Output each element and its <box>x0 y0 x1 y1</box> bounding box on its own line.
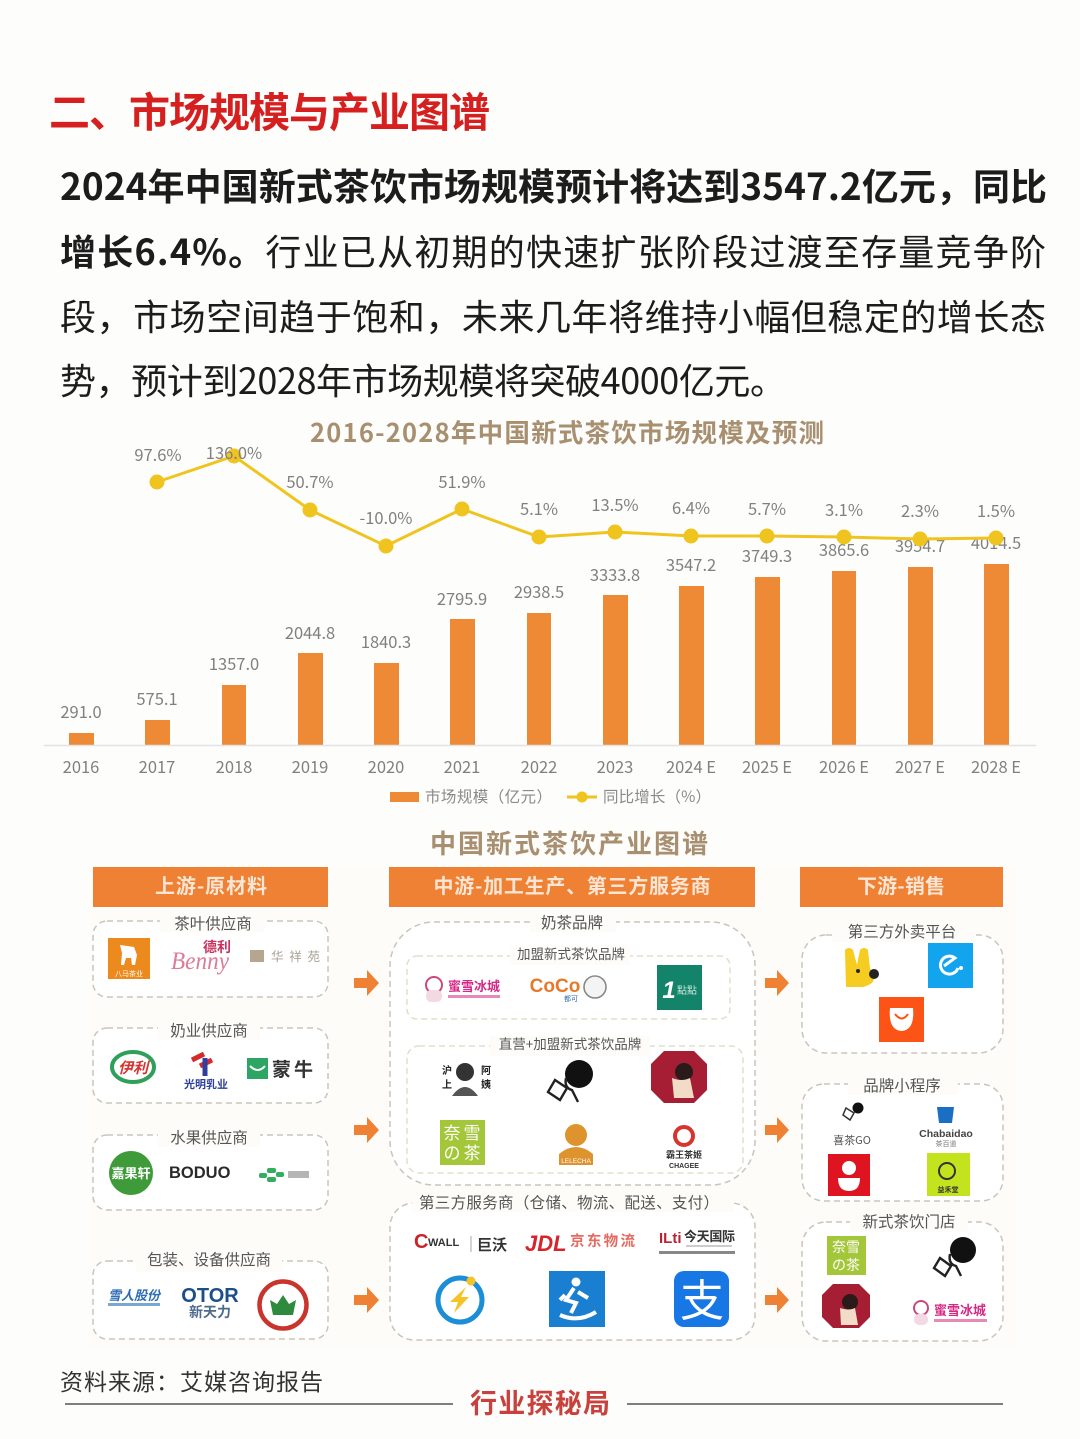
panel: brand mini programs: 品牌小程序 <box>863 1074 941 1096</box>
column: midstream <box>389 867 755 1340</box>
heading: midstream <box>389 867 755 907</box>
icon: alipay: 支 <box>680 1265 724 1329</box>
logo: mixue: 蜜雪冰城 <box>934 1300 986 1319</box>
heading: midstream: 中游-加工生产、第三方服务商 <box>434 870 710 899</box>
growth labels: 13.5% <box>591 492 639 516</box>
heading: upstream <box>93 867 328 907</box>
logo: OTOR: 新天力 <box>189 1302 231 1322</box>
logo: huaxiangyuan <box>250 946 320 965</box>
logo: chagee <box>666 1127 702 1170</box>
logo: fruit juice supplier <box>259 1168 309 1182</box>
logo: Benny: Benny <box>171 948 230 975</box>
panel: milk tea brands <box>390 911 755 1185</box>
intro paragraph <box>60 157 1047 405</box>
bar value labels: 3954.7 <box>895 533 945 557</box>
bar value labels <box>60 530 1021 723</box>
icon: bama tea: 八马茶业 <box>115 969 143 979</box>
logo: hu shang a yi: 阿 <box>481 1062 491 1077</box>
logo: G-WALL: WALL <box>428 1237 459 1249</box>
logo: mixue: 蜜雪冰城 <box>448 976 500 995</box>
panel: packaging and equipment suppliers: 包装、设备供应商 <box>147 1248 271 1270</box>
footer rule right <box>627 1403 1003 1405</box>
year labels <box>63 754 1021 778</box>
logo: Benny <box>171 937 231 975</box>
logo: yidiandian <box>657 965 702 1010</box>
bar value labels: 1840.3 <box>361 629 411 653</box>
panel: fruit suppliers: 水果供应商 <box>170 1126 248 1148</box>
logo: JDL: 京东物流 <box>570 1230 636 1251</box>
legend: 同比增长（%） <box>603 785 711 807</box>
industry map title: 中国新式茶饮产业图谱 <box>430 824 708 861</box>
icon: smile delivery <box>879 997 924 1042</box>
growth labels: 50.7% <box>286 469 334 493</box>
panel: direct and franchise brands <box>407 1033 743 1173</box>
logo: nayuki <box>827 1236 866 1275</box>
bar value labels: 2938.5 <box>514 579 564 603</box>
year labels: 2019 <box>292 754 328 778</box>
logo: xicha go: 喜茶GO <box>833 1132 871 1148</box>
heading: upstream: 上游-原材料 <box>155 870 267 899</box>
logo: nayuki <box>440 1119 485 1165</box>
logo: CoCo: 都可 <box>564 994 578 1004</box>
logo: mixue <box>426 976 500 1002</box>
panel: third-party services: 第三方服务商（仓储、物流、配送、支付） <box>419 1191 719 1213</box>
year labels: 2022 <box>521 754 557 778</box>
growth labels: 6.4% <box>672 495 710 519</box>
icon: dada <box>549 1271 605 1327</box>
logo: BODUO: BODUO <box>169 1164 231 1182</box>
logo: CoCo: CoCo <box>530 976 580 997</box>
logo: yili: 伊利 <box>118 1057 151 1078</box>
panel: tea shops <box>802 1210 1003 1341</box>
logo: jintian guoji: ILti <box>659 1230 682 1247</box>
logo: chayan yuese <box>651 1051 707 1103</box>
logo: Benny: 德利 <box>203 937 231 957</box>
logo: mixue <box>914 1300 987 1325</box>
logo: mixue red <box>828 1154 870 1196</box>
growth labels: 51.9% <box>438 469 486 493</box>
panel: delivery platforms: 第三方外卖平台 <box>848 920 956 942</box>
column: upstream raw materials <box>93 867 328 1339</box>
logo: nayuki: 奈雪 <box>444 1119 480 1144</box>
intro paragraph: 段，市场空间趋于饱和，未来几年将维持小幅但稳定的增长态 <box>60 289 1046 341</box>
bar value labels: 1357.0 <box>209 651 259 675</box>
panel: dairy suppliers: 奶业供应商 <box>170 1019 248 1041</box>
logo: green crown <box>260 1282 306 1328</box>
legend: 市场规模（亿元） <box>425 785 552 807</box>
logo: nayuki: の茶 <box>832 1255 860 1275</box>
bar value labels: 2795.9 <box>437 586 487 610</box>
panel: milk tea brands: 奶茶品牌 <box>541 911 603 933</box>
bar value labels: 3547.2 <box>666 552 716 576</box>
growth labels: 1.5% <box>977 498 1015 522</box>
panel: franchise brands: 加盟新式茶饮品牌 <box>517 943 625 963</box>
intro paragraph: 势，预计到2028年市场规模将突破4000亿元。 <box>60 353 786 405</box>
year labels: 2024 E <box>666 754 716 778</box>
title: 二、市场规模与产业图谱 <box>49 79 490 139</box>
year labels: 2026 E <box>819 754 869 778</box>
logo: heytea <box>934 1237 976 1276</box>
icon: eleme <box>928 943 973 988</box>
logo: jiaguoxuan: 嘉果轩 <box>111 1163 151 1182</box>
logo: OTOR: OTOR <box>181 1285 239 1307</box>
panel: direct and franchise brands: 直营+加盟新式茶饮品牌 <box>499 1033 641 1053</box>
logo: nayuki: の茶 <box>444 1139 480 1164</box>
year labels: 2023 <box>597 754 633 778</box>
logo: yidiandian: 1 <box>662 977 676 1004</box>
logo: xicha go <box>833 1102 871 1148</box>
footer rule left <box>65 1403 453 1405</box>
logo: chagee: CHAGEE <box>669 1163 699 1170</box>
logo: snowman: 雪人股份 <box>108 1285 162 1304</box>
heading: downstream: 下游-销售 <box>857 870 945 899</box>
logo: chagee: 霸王茶姬 <box>666 1148 702 1161</box>
logo: JDL <box>525 1230 636 1256</box>
bar value labels: 291.0 <box>60 699 102 723</box>
logo: jintian guoji: 今天国际 <box>684 1226 735 1245</box>
logo: hu shang a yi: 上 <box>442 1076 452 1091</box>
logo: hu shang a yi: 姨 <box>481 1076 491 1091</box>
logo: heytea <box>548 1060 593 1102</box>
bar value labels: 2044.8 <box>285 620 335 644</box>
logo: lelecha <box>559 1124 593 1165</box>
logo: yidiandian: 點點 <box>677 982 697 997</box>
bar value labels: 3749.3 <box>742 543 792 567</box>
logo: chayan yuese <box>822 1284 870 1328</box>
logo: jintian guoji <box>659 1226 735 1254</box>
year labels: 2016 <box>63 754 99 778</box>
bar value labels: 4014.5 <box>971 530 1021 554</box>
chart title: 2016-2028年中国新式茶饮市场规模及预测 <box>310 413 824 450</box>
logo: G-WALL: 巨沃 <box>477 1234 507 1255</box>
growth labels: 2.3% <box>901 498 939 522</box>
logo: OTOR <box>181 1285 239 1322</box>
logo: JDL: JDL <box>525 1231 567 1256</box>
logo: lelecha: LELECHA <box>561 1158 591 1165</box>
logo: yili <box>112 1052 154 1082</box>
icon: shansong <box>438 1276 482 1322</box>
panel: third-party services <box>390 1191 755 1340</box>
icon: meituan <box>845 948 879 987</box>
icon: bama tea <box>108 938 150 979</box>
year labels: 2020 <box>368 754 404 778</box>
logo: mengniu: 蒙牛 <box>272 1055 313 1082</box>
column: downstream sales <box>800 867 1003 1341</box>
source note: 资料来源：艾媒咨询报告 <box>60 1363 323 1397</box>
logo: CoCo <box>530 976 606 1004</box>
logo: shuyi: 益禾堂 <box>938 1185 958 1195</box>
bar series: market size <box>69 564 1009 745</box>
year labels: 2018 <box>216 754 252 778</box>
footer brand: 行业探秘局 <box>470 1382 610 1421</box>
year labels: 2021 <box>444 754 480 778</box>
axis baseline <box>44 744 1036 746</box>
growth labels: 5.7% <box>748 496 786 520</box>
logo: bright dairy <box>184 1054 228 1092</box>
growth labels: -10.0% <box>360 505 412 529</box>
panel: brand mini programs <box>802 1074 1003 1201</box>
year labels: 2025 E <box>742 754 792 778</box>
panel: fruit suppliers <box>93 1126 328 1210</box>
growth line <box>150 448 1004 554</box>
year labels: 2027 E <box>895 754 945 778</box>
intro paragraph: 增长6.4%。行业已从初期的快速扩张阶段过渡至存量竞争阶 <box>60 224 1046 276</box>
logo: G-WALL: C <box>414 1231 428 1253</box>
logo: chabaidao: 茶百道 <box>936 1139 956 1149</box>
legend <box>390 785 711 807</box>
growth labels: 136.0% <box>206 440 262 464</box>
intro paragraph: 2024年中国新式茶饮市场规模预计将达到3547.2亿元，同比 <box>60 157 1047 211</box>
panel: dairy suppliers <box>93 1019 328 1103</box>
logo: nayuki: 奈雪 <box>832 1237 860 1257</box>
arrows: upstream to midstream <box>354 970 379 1313</box>
logo: chabaidao: Chabaidao <box>919 1128 973 1140</box>
year labels: 2028 E <box>971 754 1021 778</box>
growth labels: 5.1% <box>520 496 558 520</box>
logo: hu shang a yi <box>442 1062 491 1096</box>
logo: chabaidao <box>919 1107 973 1149</box>
bar value labels: 3865.6 <box>819 537 869 561</box>
year labels: 2017 <box>139 754 175 778</box>
logo: G-WALL <box>414 1231 507 1255</box>
panel: franchise brands <box>407 943 730 1019</box>
arrows: midstream to downstream <box>765 970 789 1313</box>
logo: mengniu <box>247 1055 313 1082</box>
heading: downstream <box>800 867 1003 907</box>
logo: huaxiangyuan: 华祥苑 <box>271 946 320 965</box>
panel: tea shops: 新式茶饮门店 <box>862 1210 956 1232</box>
panel: delivery platforms <box>802 920 1003 1053</box>
logo: hu shang a yi: 沪 <box>442 1062 452 1077</box>
growth labels: 3.1% <box>825 497 863 521</box>
combo chart: market size and growth <box>44 440 1036 807</box>
bar value labels: 3333.8 <box>590 562 640 586</box>
panel: packaging and equipment suppliers <box>93 1248 328 1339</box>
panel: tea suppliers: 茶叶供应商 <box>174 912 252 934</box>
growth labels <box>134 440 1015 529</box>
growth labels: 97.6% <box>134 442 182 466</box>
logo: jiaguoxuan <box>109 1151 153 1195</box>
panel: tea suppliers <box>93 912 328 997</box>
panel: industry map background <box>90 866 1016 1348</box>
bar value labels: 575.1 <box>136 686 178 710</box>
logo: shuyi <box>927 1153 970 1196</box>
logo: bright dairy: 光明乳业 <box>184 1076 228 1092</box>
